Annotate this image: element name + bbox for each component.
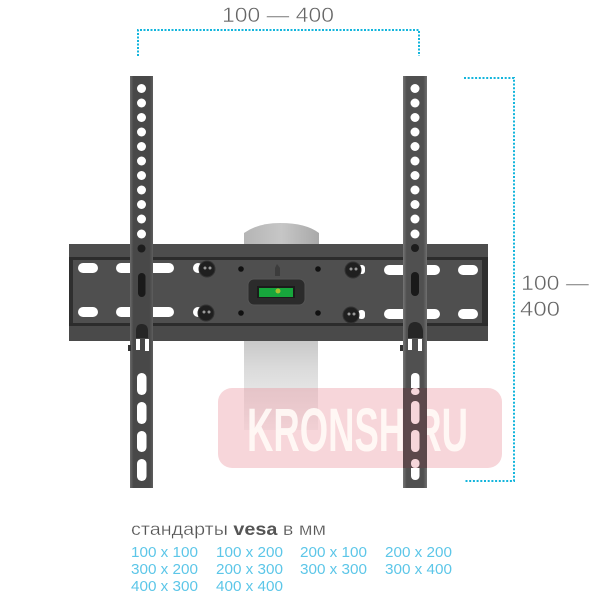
dimension: height bracket [464,78,514,481]
label: height range: 100 — [521,271,590,295]
VESA heading: стандарты vesa в мм [131,519,326,539]
plate slots [78,263,478,319]
VESA sizes list: 300 x 300 [300,562,367,578]
VESA sizes list: 300 x 400 [385,562,452,578]
label: height range: 400 [520,297,560,321]
label: width range: 100 — 400 [222,3,334,27]
right rail slots [411,373,420,480]
watermark [218,388,502,468]
plate screws [198,261,361,323]
left rail [128,76,153,488]
VESA sizes list: 100 x 200 [216,545,283,561]
VESA sizes list: 200 x 100 [300,545,367,561]
VESA sizes list: 100 x 100 [131,545,198,561]
arrow mark [275,264,280,276]
label: height range [520,271,590,321]
VESA sizes list: 200 x 200 [385,545,452,561]
VESA sizes list: 300 x 200 [131,562,198,578]
right rail round holes [410,84,420,238]
plate small holes [238,266,321,316]
left rail round holes [137,84,146,238]
mounting plate [69,244,488,341]
spirit level [248,279,305,305]
VESA sizes list: 400 x 400 [216,579,283,595]
wall column [244,223,319,430]
VESA sizes list: 200 x 300 [216,562,283,578]
left rail slots [137,373,146,481]
VESA sizes list: 400 x 300 [131,579,198,595]
right rail [400,76,427,488]
dimension: width bracket [138,30,419,56]
VESA sizes list [131,545,452,595]
rail seen through watermark [403,388,427,468]
